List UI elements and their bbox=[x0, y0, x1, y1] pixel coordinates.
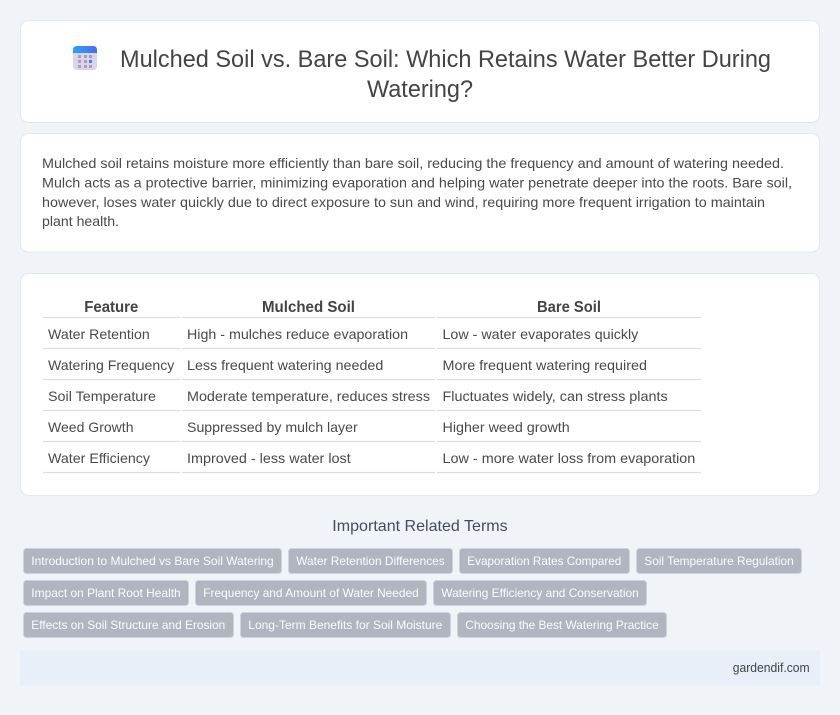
heading: related terms: Important Related Terms bbox=[332, 518, 508, 535]
tag bbox=[460, 548, 630, 574]
tag: Watering Efficiency and Conservation bbox=[441, 586, 639, 600]
tag bbox=[636, 548, 802, 574]
tag bbox=[434, 580, 646, 606]
row: weed growth: Weed Growth bbox=[48, 419, 134, 435]
tag bbox=[288, 548, 452, 574]
row: weed growth: Higher weed growth bbox=[442, 419, 570, 435]
table header bbox=[84, 299, 601, 316]
row: water retention: High - mulches reduce evaporation bbox=[187, 326, 408, 342]
tag: Frequency and Amount of Water Needed bbox=[203, 586, 419, 600]
panel: title card bbox=[20, 20, 820, 122]
footer bbox=[20, 651, 820, 685]
row: soil temperature: Soil Temperature bbox=[48, 388, 156, 404]
row: water efficiency: Low - more water loss from evaporation bbox=[442, 450, 695, 466]
tag bbox=[24, 548, 282, 574]
row: soil temperature: Moderate temperature, reduces stress bbox=[187, 388, 430, 404]
tag: Evaporation Rates Compared bbox=[467, 554, 621, 568]
tag: Long-Term Benefits for Soil Moisture bbox=[248, 618, 443, 632]
text block: summary: Mulch acts as a protective barrier, minimizing evaporation and helping water penetrate deeper into the roots. Bare soil, bbox=[42, 174, 792, 190]
title: Mulched Soil vs. Bare Soil: Which Retains Water Better During bbox=[120, 46, 771, 73]
row: water efficiency: Improved - less water lost bbox=[187, 450, 351, 466]
tag: Effects on Soil Structure and Erosion bbox=[31, 618, 225, 632]
row: water efficiency: Water Efficiency bbox=[48, 450, 150, 466]
table header: Feature bbox=[84, 299, 138, 316]
text block: summary: Mulched soil retains moisture more efficiently than bare soil, reducing the frequency and amount of watering needed. bbox=[42, 155, 784, 171]
tag: Soil Temperature Regulation bbox=[644, 554, 794, 568]
tag bbox=[458, 612, 666, 638]
table header: Bare Soil bbox=[537, 299, 601, 316]
text block: summary bbox=[42, 155, 792, 229]
footer: gardendif.com bbox=[733, 660, 810, 675]
panel: related term tags bbox=[24, 548, 802, 638]
tag bbox=[240, 612, 450, 638]
tag: Choosing the Best Watering Practice bbox=[465, 618, 659, 632]
row: watering frequency: Less frequent watering needed bbox=[187, 357, 383, 373]
tag: Introduction to Mulched vs Bare Soil Watering bbox=[31, 554, 274, 568]
row: soil temperature: Fluctuates widely, can stress plants bbox=[442, 388, 668, 404]
panel: comparison table bbox=[20, 274, 820, 496]
row: watering frequency: More frequent watering required bbox=[442, 357, 647, 373]
row: water retention: Water Retention bbox=[48, 326, 150, 342]
panel: summary paragraph bbox=[20, 134, 820, 252]
tag bbox=[24, 612, 234, 638]
row: water retention bbox=[48, 326, 638, 342]
row: weed growth bbox=[48, 419, 570, 435]
tag bbox=[196, 580, 426, 606]
text block: summary: plant health. bbox=[42, 213, 119, 229]
icon: calendar bbox=[73, 46, 97, 70]
row: water retention: Low - water evaporates quickly bbox=[442, 326, 638, 342]
row: water efficiency bbox=[48, 450, 695, 466]
title bbox=[120, 46, 771, 103]
tag bbox=[24, 580, 188, 606]
tag: Water Retention Differences bbox=[296, 554, 445, 568]
row: soil temperature bbox=[48, 388, 668, 404]
row: watering frequency: Watering Frequency bbox=[48, 357, 174, 373]
row: watering frequency bbox=[48, 357, 647, 373]
tag: Impact on Plant Root Health bbox=[31, 586, 181, 600]
text block: summary: however, loses water quickly due to direct exposure to sun and wind, requiring more frequent irrigation to maintain bbox=[42, 194, 765, 210]
table header: Mulched Soil bbox=[262, 299, 355, 316]
row: weed growth: Suppressed by mulch layer bbox=[187, 419, 358, 435]
title: Watering? bbox=[367, 76, 473, 103]
